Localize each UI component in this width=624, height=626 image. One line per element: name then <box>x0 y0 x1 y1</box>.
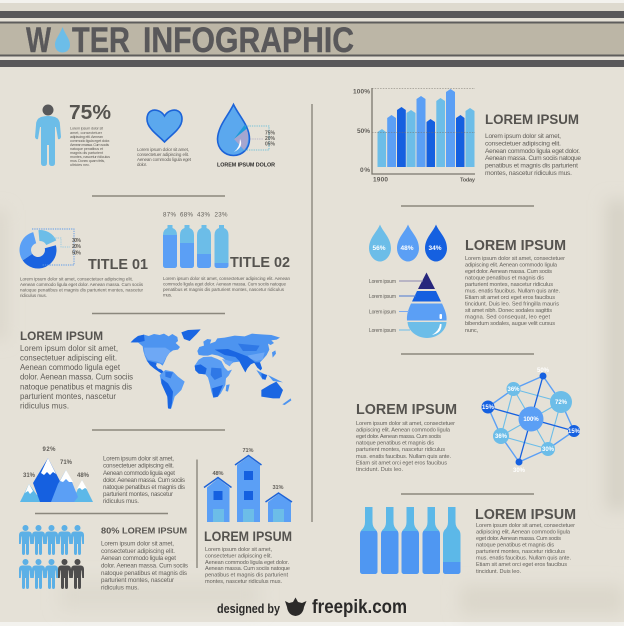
house 2: 71% <box>242 448 254 454</box>
panel: mountains: parturient montes, nascetur <box>103 491 173 498</box>
panel: person 75% <box>35 101 111 167</box>
layer labels: Lorem ipsum <box>369 310 396 316</box>
panel: title 02 bottles: mus. <box>163 292 172 298</box>
panel: houses: montes, nascetur ridiculus mus. <box>205 579 282 585</box>
network diagram: 100% <box>523 417 539 423</box>
panel: world map text: parturient montes, nascetur <box>20 392 116 401</box>
bottle 4 <box>422 507 440 574</box>
gridline labels <box>353 88 476 184</box>
panel: title 02 bottles: 43% <box>197 212 210 218</box>
panel: title 02 bottles: 68% <box>180 212 193 218</box>
layer labels: Lorem ipsum <box>369 279 396 285</box>
bottle 3 <box>197 225 211 268</box>
donut chart: 30% <box>72 238 82 244</box>
panel: mountains: Aenean commodo ligula eget <box>103 470 175 477</box>
layer labels <box>369 279 423 334</box>
title: W <box>26 21 51 60</box>
title: TER <box>72 21 130 60</box>
panel: people 80%: consectetuer adipiscing elit. <box>101 548 175 555</box>
panel: network <box>356 368 581 474</box>
donut chart <box>19 229 82 269</box>
drop 34%: 34% <box>428 245 442 252</box>
panel: world map text: Lorem ipsum dolor sit amet, <box>20 344 118 353</box>
panel: people 80%: Lorem ipsum dolor sit amet, <box>101 540 174 548</box>
panel: drops: bibendum sodales, augue velit cursus <box>465 321 555 327</box>
panel: heart: Aenean commodo ligula eget <box>137 157 192 162</box>
drop 56%: 56% <box>372 245 386 252</box>
panel: drops: adipiscing elit. Aenean commodo ligula <box>465 262 558 268</box>
panel: person 75%: Aenean massa. Cum sociis <box>70 143 109 147</box>
gridline labels: Today <box>460 178 476 184</box>
panel: people 80%: parturient montes, nascetur <box>101 577 174 584</box>
panel: water drop pie: 75% <box>265 130 276 136</box>
panel: bar chart: penatibus et magnis dis parturient <box>485 162 578 170</box>
layered drop <box>407 272 447 338</box>
panel: person 75%: montes, nascetur ridiculus <box>70 155 110 159</box>
donut chart: 50% <box>72 250 82 256</box>
panel: wine bottles: LOREM IPSUM <box>475 507 576 523</box>
panel: title 01 donut <box>19 229 148 298</box>
panel: water drop pie: LOREM IPSUM DOLOR <box>217 162 275 168</box>
bottle 1 <box>163 225 177 268</box>
panel: people 80%: natoque penatibus et magnis dis <box>101 570 187 577</box>
panel: drops: Etiam sit amet orci eget eros faucibus <box>465 295 555 301</box>
panel: houses: Lorem ipsum dolor sit amet, <box>205 547 272 553</box>
panel: bar chart <box>353 88 581 184</box>
panel: title 02 bottles: penatibus et magnis dis parturient montes, nascetur ridiculus <box>163 287 285 292</box>
drop 48% <box>397 224 419 262</box>
panel: drops: tincidunt. Duis leo. Sed fringilla mauris <box>465 302 559 308</box>
panel: person 75%: Lorem ipsum dolor sit <box>70 126 104 130</box>
panel: world map text: consectetuer adipiscing elit. <box>20 354 117 362</box>
panel: wine bottles: Lorem ipsum dolor sit amet, consectetuer <box>476 523 575 529</box>
panel: network: LOREM IPSUM <box>356 402 457 418</box>
bars <box>378 89 474 167</box>
panel: houses: LOREM IPSUM <box>204 529 292 544</box>
mountains chart: 92% <box>42 447 56 453</box>
panel: title 02 bottles: Lorem ipsum dolor sit amet, consectetuer adipiscing elit. Aenean <box>163 276 290 281</box>
bottle 2 <box>180 225 194 268</box>
panel: wine bottles: adipiscing elit. Aenean commodo ligula <box>476 530 571 536</box>
panel: wine bottles: natoque penatibus et magnis dis <box>476 542 554 548</box>
title <box>26 21 354 60</box>
network diagram: 36% <box>495 434 508 440</box>
panel: title 01 donut: TITLE 01 <box>88 256 148 273</box>
panel: world map text: ridiculus mus. <box>20 402 69 410</box>
panel: person 75%: mus. Donec quam felis, <box>70 159 105 163</box>
panel: wine bottles: parturient montes, nascetur ridiculus <box>476 549 565 555</box>
panel: bar chart: Aenean massa. Cum sociis natoque <box>485 155 581 162</box>
panel: bar chart: LOREM IPSUM <box>485 112 579 127</box>
panel: title 01 donut: ridiculus mus. <box>20 293 47 298</box>
icon: freepik logo <box>285 598 306 616</box>
gridline labels: 100% <box>353 88 370 96</box>
mountains chart: 71% <box>60 460 73 466</box>
network diagram: 36% <box>507 387 520 393</box>
panel: title 02 bottles: commodo ligula eget dolor. Aenean massa. Cum sociis natoque <box>163 282 286 286</box>
gridline labels: 1900 <box>373 176 388 184</box>
pictogram people <box>19 525 84 589</box>
panel: wine bottles <box>360 507 576 575</box>
panel: drops: natoque penatibus et magnis dis <box>465 276 544 282</box>
panel: network: parturient montes, nascetur ridiculus <box>356 447 445 453</box>
network diagram: 50% <box>537 368 550 374</box>
panel: person 75%: natoque penatibus et <box>70 147 104 151</box>
mountains chart: 48% <box>77 473 90 479</box>
header banner <box>0 11 624 67</box>
panel: water drop pie: 20% <box>265 136 276 142</box>
panel: title 02 bottles <box>163 212 290 298</box>
panel: drops: Lorem ipsum dolor sit amet, consectetuer <box>465 256 565 262</box>
panel: world map text: Aenean commodo ligula eget <box>20 363 121 372</box>
world map <box>131 329 291 409</box>
panel: people 80%: dolor. Aenean massa. Cum sociis <box>101 562 188 570</box>
panel: world map text: LOREM IPSUM <box>20 329 103 343</box>
footer credit: freepik.com <box>312 597 407 618</box>
panel: network: eget dolor. Aenean massa. Cum sociis <box>356 434 441 440</box>
house 3: 31% <box>272 485 284 491</box>
panel: drops <box>369 224 566 338</box>
panel: houses: consectetuer adipiscing elit. <box>205 554 272 560</box>
network diagram: 72% <box>555 400 568 406</box>
panel: water drop pie <box>217 104 276 168</box>
panel: people 80%: ridiculus mus. <box>101 584 139 592</box>
panel: drops: LOREM IPSUM <box>465 238 566 254</box>
footer credit <box>217 597 407 618</box>
bottle 1 <box>360 507 378 574</box>
drop 56% <box>369 224 391 262</box>
panel: heart: consectetuer adipiscing elit. <box>137 152 189 157</box>
chart axes <box>372 88 475 174</box>
panel: houses: penatibus et magnis dis parturient <box>205 572 288 578</box>
house 1: 48% <box>212 471 224 477</box>
panel: person 75%: amet, consectetuer <box>70 131 103 135</box>
panel: title 02 bottles: 87% <box>163 212 176 218</box>
gridline labels: 50% <box>357 128 370 135</box>
panel: wine bottles: eget dolor. Aenean massa. Cum sociis <box>476 536 561 542</box>
network diagram: 30% <box>513 468 526 474</box>
panel: wine bottles: Etiam sit amet orci eget eros faucibus <box>476 562 567 568</box>
panel: world map text: dolor. Aenean massa. Cum sociis <box>20 372 133 382</box>
panel: drops: eget dolor. Aenean massa. Cum sociis <box>465 269 552 275</box>
title: INFOGRAPHIC <box>143 21 354 60</box>
panel: network: tincidunt. Duis leo. <box>356 467 403 473</box>
panel: mountains <box>20 447 185 505</box>
network diagram <box>482 368 581 474</box>
panel: houses <box>204 448 292 585</box>
network diagram: 30% <box>542 447 555 453</box>
panel: network: natoque penatibus et magnis dis <box>356 440 434 446</box>
donut chart: 20% <box>72 244 82 250</box>
panel: houses: Aenean massa. Cum sociis natoque <box>205 566 290 572</box>
panel: drops: nunc, <box>465 328 478 334</box>
panel: drops: magna. Sed consequat, leo eget <box>465 314 550 320</box>
panel: bar chart: Lorem ipsum dolor sit amet, <box>485 133 561 140</box>
panel: title 02 bottles: TITLE 02 <box>230 254 290 271</box>
gridline labels: 0% <box>360 167 370 174</box>
panel: heart: dolor. <box>137 162 147 167</box>
panel: heart: Lorem ipsum dolor sit amet, <box>137 147 189 152</box>
layer labels: Lorem ipsum <box>369 328 396 334</box>
network diagram: 15% <box>482 405 495 411</box>
mountains chart: 31% <box>23 473 36 479</box>
panel: wine bottles: tincidunt. Duis leo. <box>476 569 521 575</box>
panel: world map text: natoque penatibus et magnis dis <box>20 382 132 392</box>
panel: person 75%: commodo ligula eget dolor. <box>70 139 110 143</box>
panel: title 01 donut: natoque penatibus et magnis dis parturient montes, nascetur <box>20 288 144 292</box>
panel: people 80%: 80% LOREM IPSUM <box>101 526 187 536</box>
panel: network: mus. enatis faucibus. Nullam quis ante. <box>356 454 451 460</box>
panel: wine bottles: mus. enatis faucibus. Nullam quis ante. <box>476 556 571 562</box>
panel: person 75%: 75% <box>69 101 111 124</box>
drop 48%: 48% <box>400 245 414 252</box>
panel: network: Etiam sit amet orci eget eros faucibus <box>356 460 447 466</box>
panel: person 75%: ultricies nec. <box>70 163 90 167</box>
bottle 4 <box>214 225 228 268</box>
panel: title 02 bottles: 23% <box>214 212 228 218</box>
panel: network: adipiscing elit. Aenean commodo ligula <box>356 428 451 434</box>
panel: water drop pie: 05% <box>265 142 276 148</box>
panel: drops: mus. enatis faucibus. Nullam quis ante. <box>465 288 560 294</box>
panel: houses: Aenean commodo ligula eget dolor. <box>205 560 289 566</box>
panel: people 80%: Aenean commodo ligula eget <box>101 555 176 562</box>
panel: person 75%: adipiscing elit. Aenean <box>70 135 103 139</box>
panel: people 80% <box>19 525 188 592</box>
panel: mountains: Lorem ipsum dolor sit amet, <box>103 456 174 462</box>
panel: bar chart: Aenean commodo ligula eget dolor. <box>485 148 580 155</box>
panel: drops: parturient montes, nascetur ridiculus <box>465 282 553 288</box>
panel: heart <box>137 110 192 167</box>
network diagram: 15% <box>568 429 581 435</box>
panel: mountains: natoque penatibus et magnis dis <box>103 484 185 491</box>
panel: person 75%: magnis dis parturient <box>70 151 104 155</box>
panel: bar chart: consectetuer adipiscing elit. <box>485 140 561 148</box>
mountains chart <box>20 447 93 502</box>
panel: drops: sit amet nibh. Donec sodales sagittis <box>465 308 552 314</box>
panel: network: Lorem ipsum dolor sit amet, consectetuer <box>356 421 455 427</box>
bottle 3 <box>402 507 419 574</box>
panel: title 01 donut: Aenean commodo ligula eget dolor. Aenean massa. Cum sociis <box>20 282 144 287</box>
panel: mountains: dolor. Aenean massa. Cum sociis <box>103 477 185 484</box>
footer credit: designed by <box>217 601 281 616</box>
layer labels: Lorem ipsum <box>369 294 396 300</box>
drop 34% <box>425 224 447 262</box>
panel: title 01 donut: Lorem ipsum dolor sit amet, consectetuer adipiscing elit. <box>20 276 133 282</box>
bottle 2 <box>381 507 398 574</box>
panel: mountains: consectetuer adipiscing elit. <box>103 462 174 470</box>
panel: world map text <box>20 329 133 410</box>
bottle 5 <box>443 507 460 574</box>
panel: mountains: ridiculus mus. <box>103 498 139 505</box>
panel: bar chart: montes, nascetur ridiculus mus. <box>485 170 572 177</box>
